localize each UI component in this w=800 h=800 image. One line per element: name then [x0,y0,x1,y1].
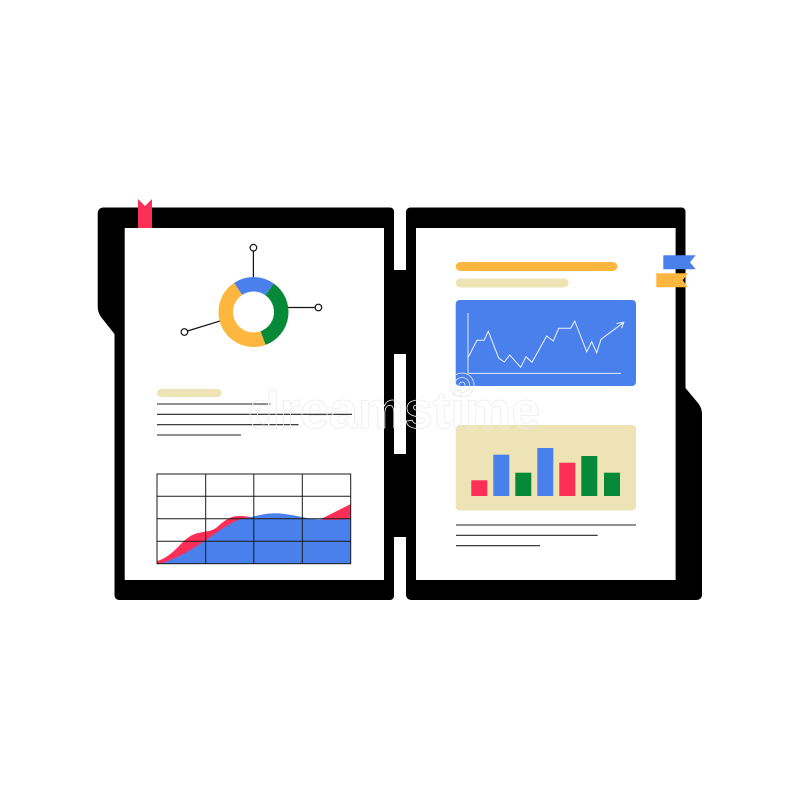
heading pill [157,389,222,397]
chart axes [468,313,621,373]
watermark [248,373,540,440]
red area [157,504,351,564]
blue panel background [456,300,636,386]
subtitle bar: beige [456,278,569,288]
donut segment: blue [234,277,274,295]
page sheet [416,228,676,580]
bookmark: red [138,199,152,228]
donut chart with callouts [181,244,322,347]
line chart panel [456,300,636,386]
table grid [157,474,351,564]
title bar: yellow [456,262,617,271]
beige panel background [456,425,636,510]
folder: black open folder [98,208,702,600]
bar chart panel [456,425,636,510]
left document page [125,228,384,580]
left folder cover [98,208,394,600]
bars [471,448,620,496]
lower hinge [393,454,407,537]
upper hinge [393,270,407,354]
donut segment: yellow [218,283,266,347]
flag: blue tab [663,255,696,269]
callout leader lines [181,244,322,335]
text lines [456,525,636,546]
trend line with arrow [468,321,624,367]
flag: yellow tab [656,273,688,287]
right folder cover [406,208,702,600]
page sheet [125,228,384,580]
text lines [157,404,352,435]
watermark text: dreamstime [248,382,540,440]
right document page [416,228,676,580]
donut segment: green [261,283,288,345]
area chart with grid [157,474,351,564]
blue area [157,513,351,564]
watermark spiral logo [450,373,474,397]
